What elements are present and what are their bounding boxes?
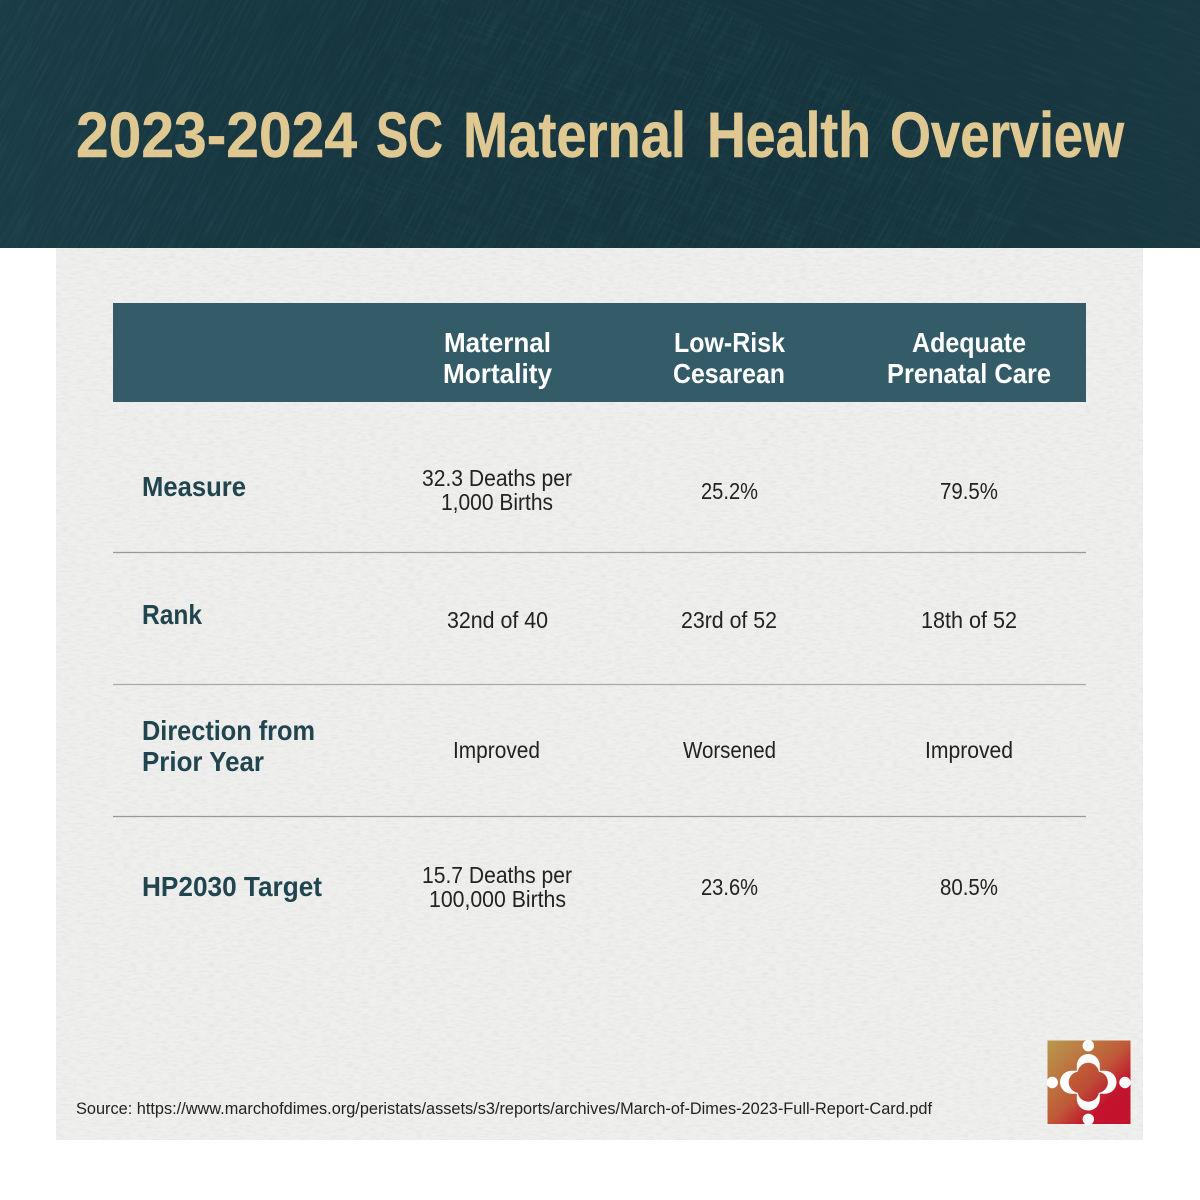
column heading: Low-Risk Cesarean: Low-Risk [674, 327, 785, 358]
row: Measure: 1,000 Births [441, 489, 553, 515]
row: Direction from Prior Year: Improved [925, 737, 1013, 763]
title: 2023-2024 [76, 99, 357, 171]
column heading: Adequate Prenatal Care: Adequate [912, 327, 1026, 358]
row: HP2030 Target: 23.6% [701, 874, 758, 900]
row: Direction from Prior Year: Direction from [142, 715, 315, 746]
column heading: Adequate Prenatal Care: Prenatal Care [887, 358, 1051, 389]
row: Rank [142, 599, 1017, 633]
source citation: Source: https://www.marchofdimes.org/peristats/assets/s3/reports/archives/March-of-Dimes-2023-Full-Report-Card.pdf [76, 1099, 932, 1118]
row: Measure: Measure [142, 471, 246, 502]
title: Maternal [463, 99, 686, 171]
row: Measure: 79.5% [940, 478, 998, 504]
row: HP2030 Target: 80.5% [940, 874, 998, 900]
row: Measure: 32.3 Deaths per [422, 465, 572, 491]
row: Direction from Prior Year: Improved [453, 737, 540, 763]
title [76, 99, 1124, 171]
title: SC [376, 99, 443, 171]
table header row [113, 303, 1086, 402]
row: HP2030 Target: 15.7 Deaths per [422, 862, 572, 888]
row: HP2030 Target: HP2030 Target [142, 871, 322, 902]
row: Rank: 32nd of 40 [447, 607, 548, 633]
panel: paper background [56, 248, 1143, 1140]
column heading: Low-Risk Cesarean [673, 327, 785, 389]
row: Rank: Rank [142, 599, 202, 630]
header banner [0, 0, 1200, 248]
icon: logo [1047, 1040, 1131, 1125]
row: Direction from Prior Year: Prior Year [142, 746, 264, 777]
column heading: Maternal Mortality: Maternal [444, 327, 551, 358]
table [113, 303, 1086, 912]
row: HP2030 Target: 100,000 Births [429, 886, 566, 912]
row: HP2030 Target [142, 862, 998, 912]
column heading: Low-Risk Cesarean: Cesarean [673, 358, 785, 389]
row: Measure [142, 465, 998, 515]
row: Measure: 25.2% [701, 478, 758, 504]
column heading: Maternal Mortality: Mortality [443, 358, 552, 389]
column heading: Adequate Prenatal Care [887, 327, 1051, 389]
row: Rank: 23rd of 52 [681, 607, 777, 633]
row: Direction from Prior Year [142, 715, 1013, 777]
title: Overview [890, 99, 1124, 171]
row: Direction from Prior Year: Worsened [683, 737, 776, 763]
title: Health [707, 99, 871, 171]
column heading: Maternal Mortality [443, 327, 552, 389]
row: Rank: 18th of 52 [921, 607, 1017, 633]
